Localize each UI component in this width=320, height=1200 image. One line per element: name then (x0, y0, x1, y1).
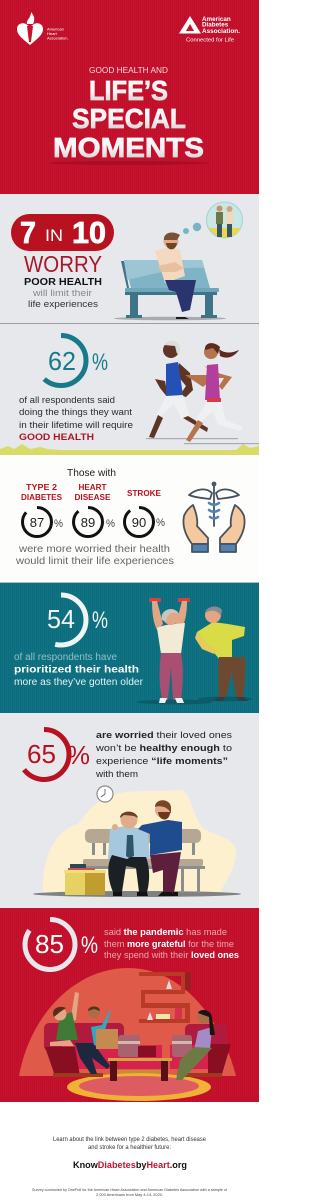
text: worried loved ones: experience “life moments” (96, 756, 228, 767)
text: worried about life experiences: were more worried their health (18, 543, 170, 555)
ring: 65%: 65 (27, 739, 56, 769)
panel: 85 percent more grateful (0, 908, 259, 1102)
text: good health requirement: GOOD HEALTH (19, 432, 94, 443)
title: SPECIAL (72, 103, 186, 134)
text: survey source (32, 1188, 227, 1197)
logo: American Heart Association (17, 12, 69, 45)
text: more grateful: them more grateful for the time (104, 939, 234, 950)
text: more grateful: they spend with their loved ones (104, 950, 239, 961)
text: more grateful: said the pandemic has made (104, 927, 227, 938)
text: worried loved ones: with them (95, 769, 138, 780)
title: GOOD HEALTH AND (89, 66, 168, 75)
link: KnowDiabetesbyHeart.org: KnowDiabetesbyHeart.org (73, 1160, 187, 1171)
panel: 62 percent good health (0, 324, 259, 455)
text: worry poor health: will limit their (32, 288, 92, 298)
stat: stroke 90%: STROKE (127, 489, 162, 498)
logo: American Diabetes Association: Association. (202, 28, 240, 35)
badge: 7 in 10: IN (45, 226, 63, 245)
stat: stroke 90%: % (156, 517, 165, 529)
text: good health requirement: in their lifetime will require (19, 420, 133, 430)
stat: type 2 diabetes 87%: 87 (30, 515, 44, 530)
panel: 54 percent prioritized health (0, 583, 259, 713)
illustration: man worrying on bench (114, 202, 242, 320)
stat: type 2 diabetes 87%: TYPE 2 (26, 483, 58, 492)
badge: 7 in 10 (11, 214, 114, 251)
text: worried loved ones: won’t be healthy enough to (95, 743, 232, 754)
text: worried loved ones (95, 730, 232, 780)
text: learn more: and stroke for a healthier future: (88, 1145, 171, 1151)
text: worry poor health: life experiences (28, 299, 99, 309)
ring: 85%: % (81, 932, 98, 959)
text: worried about life experiences: would limit their life experiences (15, 555, 174, 567)
text: prioritized their health: more as they’ve gotten older (14, 677, 144, 688)
ring: 62%: 62 (48, 346, 76, 376)
text: good health requirement: of all respondents said (19, 395, 115, 405)
illustration: couple running (146, 341, 259, 444)
text: worry poor health: POOR HEALTH (24, 277, 102, 288)
ring: 62% (36, 336, 108, 386)
panel: 7 in 10 worry (0, 194, 259, 324)
ring: 54% (36, 595, 108, 645)
stat: type 2 diabetes 87% (21, 483, 63, 536)
ring: 65%: % (67, 740, 90, 770)
title (49, 66, 209, 165)
logo: American Diabetes Association: Connected for Life (186, 38, 234, 44)
ring: 54%: 54 (47, 604, 75, 634)
title: LIFE’S (89, 75, 168, 106)
icon: caduceus in hands (183, 482, 245, 552)
text: worried about life experiences (15, 543, 174, 567)
illustration: friends on bench (33, 786, 241, 897)
text: good health requirement (19, 395, 133, 443)
logo: American Diabetes Association (179, 16, 240, 44)
stat: heart disease 89% (74, 483, 115, 536)
text: more grateful (104, 927, 239, 961)
panel: 65 percent worried about loved ones (0, 713, 259, 908)
title: MOMENTS (53, 132, 204, 163)
logo: American Heart Association: Heart (47, 31, 58, 36)
panel: those with conditions (0, 455, 259, 583)
heading: those with: Those with (67, 468, 116, 479)
ring: 54%: % (92, 607, 108, 634)
ring: 85%: 85 (35, 929, 64, 959)
stat: heart disease 89%: HEART (78, 483, 107, 492)
stat: heart disease 89%: 89 (81, 515, 95, 530)
text: prioritized their health (14, 652, 144, 688)
badge: 7 in 10: 7 (20, 215, 36, 250)
ring: 65% (19, 730, 90, 780)
text: worry poor health (24, 251, 102, 309)
illustration: family in living room (19, 968, 236, 1101)
text: worried loved ones: are worried their loved ones (96, 730, 232, 741)
panel: footer (0, 1102, 259, 1200)
stat: type 2 diabetes 87%: % (54, 518, 63, 530)
panel: header (0, 0, 259, 194)
stat: stroke 90%: 90 (132, 515, 146, 530)
stat: type 2 diabetes 87%: DIABETES (21, 493, 63, 502)
text: prioritized their health: of all respondents have (14, 652, 117, 663)
text: prioritized their health: prioritized their health (14, 664, 139, 676)
ring: 85% (25, 920, 98, 970)
text: worry poor health: WORRY (24, 251, 102, 277)
ring: 62%: % (92, 349, 108, 376)
stat: heart disease 89%: % (106, 518, 115, 530)
illustration: seniors exercising (137, 598, 252, 704)
text: survey source: 2,000 Americans from May 4-14, 2020. (96, 1193, 163, 1197)
text: survey source: Survey conducted by OnePoll for the American Heart Association and American Diabetes Association with a sample of (32, 1188, 227, 1192)
logo: American Heart Association: Association. (47, 36, 69, 40)
logo: American Heart Association: American (47, 26, 64, 32)
text: learn more (53, 1137, 207, 1151)
logo: American Diabetes Association: American (202, 16, 231, 23)
text: good health requirement: doing the things they want (19, 407, 133, 417)
logo: American Diabetes Association: Diabetes (202, 22, 229, 28)
text: learn more: Learn about the link between type 2 diabetes, heart disease (53, 1137, 207, 1143)
stat: stroke 90% (124, 489, 165, 536)
stat: heart disease 89%: DISEASE (74, 493, 111, 502)
badge: 7 in 10: 10 (72, 215, 106, 250)
